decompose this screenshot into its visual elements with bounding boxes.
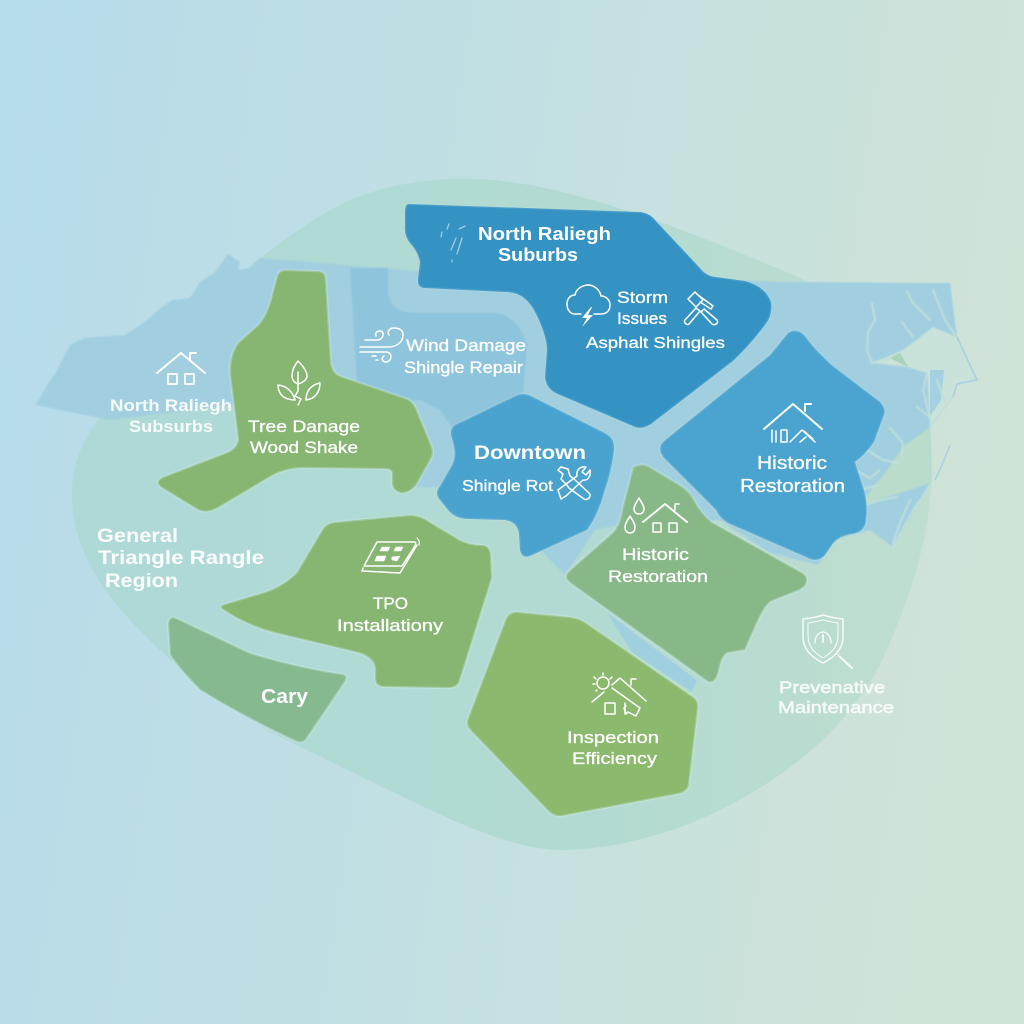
icon: house with damage bbox=[764, 404, 822, 442]
panel: preventative maintenance callout bbox=[778, 615, 894, 717]
label: inspection efficiency: Inspection bbox=[567, 729, 659, 747]
label: asphalt shingles: Asphalt Shingles bbox=[586, 335, 725, 352]
label: tree damage: Tree Danage bbox=[248, 418, 360, 436]
panel: north raleigh suburbs storm zone bbox=[405, 204, 771, 428]
icon: house bbox=[157, 353, 205, 384]
label: wind damage: Shingle Repair bbox=[404, 359, 524, 377]
label: preventative maintenance: Maintenance bbox=[778, 699, 894, 717]
label: wind damage bbox=[404, 337, 526, 377]
panel: historic restoration green zone bbox=[566, 464, 807, 682]
panel: wind damage zone bbox=[350, 268, 527, 428]
downtown shape bbox=[437, 394, 614, 557]
label: historic restoration: Restoration bbox=[608, 568, 708, 586]
label: historic restoration: Historic bbox=[757, 453, 827, 473]
label: storm issues: Issues bbox=[617, 309, 667, 328]
light blue channel along historic green bbox=[607, 613, 697, 692]
label: wind damage: Wind Damage bbox=[406, 337, 526, 355]
panel: inspection efficiency zone bbox=[467, 612, 698, 816]
label: inspection efficiency: Efficiency bbox=[572, 750, 658, 768]
inspection shape bbox=[467, 612, 698, 816]
label: preventative maintenance: Prevenative bbox=[779, 679, 885, 697]
coastal inlet bbox=[930, 370, 944, 416]
panel: historic restoration blue zone bbox=[660, 331, 885, 560]
tpo shape bbox=[221, 515, 492, 688]
historic green shape bbox=[566, 464, 807, 682]
label: cary: Cary bbox=[261, 686, 309, 708]
label: historic restoration bbox=[740, 453, 845, 496]
panel: downtown zone bbox=[437, 394, 614, 557]
label: general triangle range region: Triangle Rangle bbox=[98, 547, 264, 569]
cary shape bbox=[168, 617, 346, 742]
icon: wind bbox=[360, 328, 403, 362]
inner sound bbox=[890, 353, 908, 367]
label: north raliegh subsurbs bbox=[110, 397, 232, 436]
state outline: North Carolina bbox=[36, 254, 977, 575]
label: downtown: Downtown bbox=[474, 442, 586, 464]
triangle region backdrop blob bbox=[72, 179, 932, 850]
label: tree damage bbox=[248, 418, 360, 457]
label: north raliegh subsurbs: North Raliegh bbox=[110, 397, 232, 415]
panel: tpo installation zone bbox=[221, 515, 492, 688]
label: storm issues bbox=[617, 288, 668, 328]
label: north raliegh suburbs: Suburbs bbox=[498, 245, 578, 265]
panel: left north raleigh subsurbs bbox=[110, 353, 232, 436]
icon: rain streaks bbox=[441, 224, 465, 262]
coastal sound bbox=[873, 327, 977, 427]
north raleigh shape bbox=[405, 204, 771, 428]
label: shingle rot: Shingle Rot bbox=[462, 478, 554, 495]
panel: tree damage zone bbox=[158, 270, 433, 512]
label: tree damage: Wood Shake bbox=[250, 439, 358, 457]
label: north raliegh suburbs bbox=[478, 224, 611, 265]
label: historic restoration bbox=[608, 546, 708, 586]
icon: crossed hammers bbox=[684, 292, 718, 325]
outer banks line bbox=[935, 337, 977, 480]
label: general triangle range region bbox=[97, 525, 264, 592]
icon: roof panel bbox=[362, 538, 419, 573]
label: preventative maintenance bbox=[778, 679, 894, 717]
label: tpo installation bbox=[337, 595, 444, 635]
icon: shield with magnifier bbox=[803, 615, 852, 668]
icon: leaves bbox=[278, 361, 320, 405]
label: inspection efficiency bbox=[567, 729, 659, 768]
label: historic restoration: Historic bbox=[622, 546, 689, 564]
icon: sun and roof bbox=[592, 673, 646, 716]
icon: storm cloud bbox=[567, 285, 610, 327]
label: general triangle range region: Region bbox=[105, 570, 178, 592]
icon: drops and house bbox=[625, 498, 687, 533]
label: tpo installation: TPO bbox=[373, 595, 408, 613]
label: tpo installation: Installationy bbox=[337, 617, 444, 635]
tree damage shape bbox=[158, 270, 433, 512]
wind zone shape bbox=[350, 268, 527, 428]
panel: cary zone bbox=[168, 617, 346, 742]
lower sound bbox=[857, 427, 931, 508]
label: storm issues: Storm bbox=[617, 288, 668, 307]
label: general triangle range region: General bbox=[97, 525, 178, 547]
label: historic restoration: Restoration bbox=[740, 476, 845, 496]
estuary strokes bbox=[843, 290, 955, 547]
label: north raliegh subsurbs: Subsurbs bbox=[129, 418, 213, 436]
icon: wrench and screwdriver bbox=[558, 467, 590, 499]
label: north raliegh suburbs: North Raliegh bbox=[478, 224, 611, 244]
historic blue shape bbox=[660, 331, 885, 560]
